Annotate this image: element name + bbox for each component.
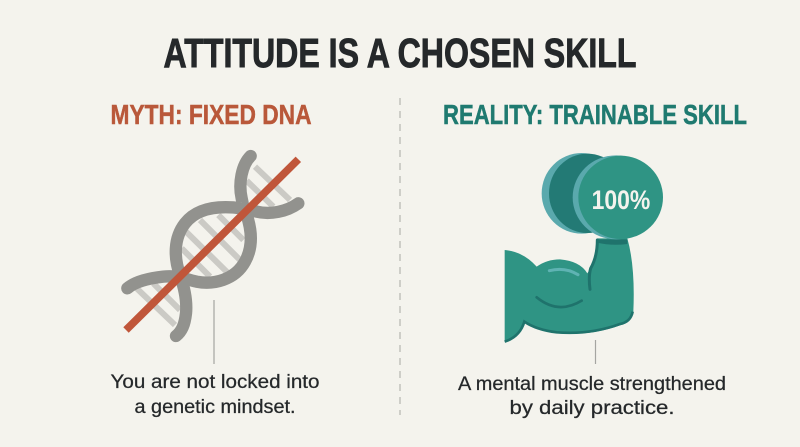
- text: myth caption: You are not locked into: [110, 372, 320, 393]
- icon: crossed-out DNA helix: [126, 156, 298, 336]
- text: reality caption line 2: by daily practice.: [510, 398, 674, 419]
- connector: reality: [594, 340, 596, 364]
- text: reality caption: A mental muscle strengthened: [458, 374, 726, 395]
- connector: myth: [213, 300, 215, 364]
- heading: myth: MYTH: FIXED DNA: [110, 99, 312, 130]
- text: myth caption line 2: a genetic mindset.: [134, 397, 296, 418]
- icon: flexed arm with 100% dumbbell: 100%: [592, 185, 650, 215]
- icon: flexed arm with 100% dumbbell: [505, 153, 663, 342]
- title: ATTITUDE IS A CHOSEN SKILL: [164, 30, 636, 76]
